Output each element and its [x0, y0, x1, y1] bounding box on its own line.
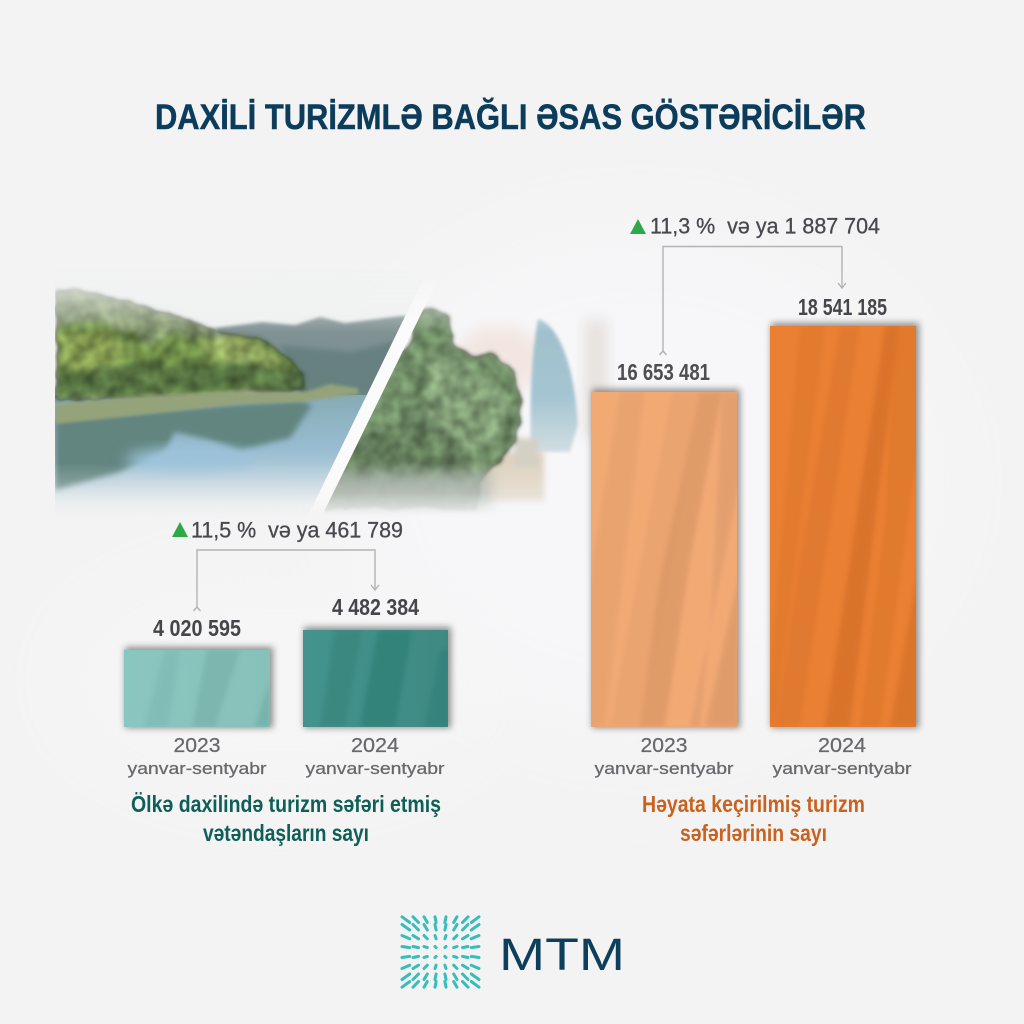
icon: radial dash grid	[402, 917, 479, 987]
axis label: 2023 right: yanvar-sentyabr	[594, 760, 734, 778]
white diagonal divider	[319, 315, 406, 493]
caption: trips: Həyata keçirilmiş turizm	[642, 791, 865, 817]
change label: trips: 11,3 % və ya 1 887 704	[650, 214, 880, 238]
logo: MTM	[402, 917, 625, 987]
axis label: 2024 right: yanvar-sentyabr	[772, 760, 912, 778]
axis label: 2024 left: yanvar-sentyabr	[306, 760, 445, 778]
change label: citizens: 11,5 % və ya 461 789	[191, 518, 403, 542]
bar: 2023 orange	[591, 392, 737, 727]
value: 16 653 481: 16 653 481	[617, 359, 710, 385]
bar: 2023 teal	[124, 650, 270, 727]
bar: 2024 teal	[303, 630, 450, 727]
bar shadow: 2024 teal	[304, 627, 451, 728]
bar shadow: 2023 teal	[125, 647, 273, 728]
bar: 2024 orange	[765, 326, 920, 727]
bracket arrow: citizens	[194, 550, 379, 611]
title: DAXİLİ TURİZMLƏ BAĞLI ƏSAS GÖSTƏRİCİLƏR	[155, 97, 866, 137]
axis label: 2024 left	[306, 735, 445, 778]
photo: lake landscape	[55, 286, 406, 504]
wordmark: MTM	[499, 929, 625, 980]
panel: left column bars	[124, 518, 451, 846]
value: 18 541 185: 18 541 185	[798, 294, 887, 320]
value: 4 482 384: 4 482 384	[332, 594, 419, 620]
axis label: 2024 left: 2024	[351, 735, 399, 757]
photo collage: lake and city	[55, 286, 612, 513]
caption: citizens: vətəndaşların sayı	[203, 820, 369, 846]
bracket arrow: trips	[660, 246, 846, 355]
caption: trips	[642, 791, 865, 846]
axis label: 2023 left: yanvar-sentyabr	[128, 760, 267, 778]
value: 4 020 595: 4 020 595	[153, 615, 241, 641]
axis label: 2024 right	[772, 735, 912, 778]
caption: citizens: Ölkə daxilində turizm səfəri etmiş	[131, 791, 441, 817]
photo: city with tree and tower	[310, 306, 608, 512]
caption: citizens	[131, 791, 441, 846]
bar shadow: 2023 orange	[592, 389, 740, 728]
caption: trips: səfərlərinin sayı	[680, 820, 827, 846]
axis label: 2024 right: 2024	[818, 735, 866, 757]
axis label: 2023 right	[594, 735, 734, 778]
axis label: 2023 left	[128, 735, 267, 778]
panel: right column bars	[565, 214, 920, 846]
bar shadow: 2024 orange	[771, 323, 919, 728]
axis label: 2023 left: 2023	[174, 735, 220, 757]
axis label: 2023 right: 2023	[640, 735, 688, 757]
